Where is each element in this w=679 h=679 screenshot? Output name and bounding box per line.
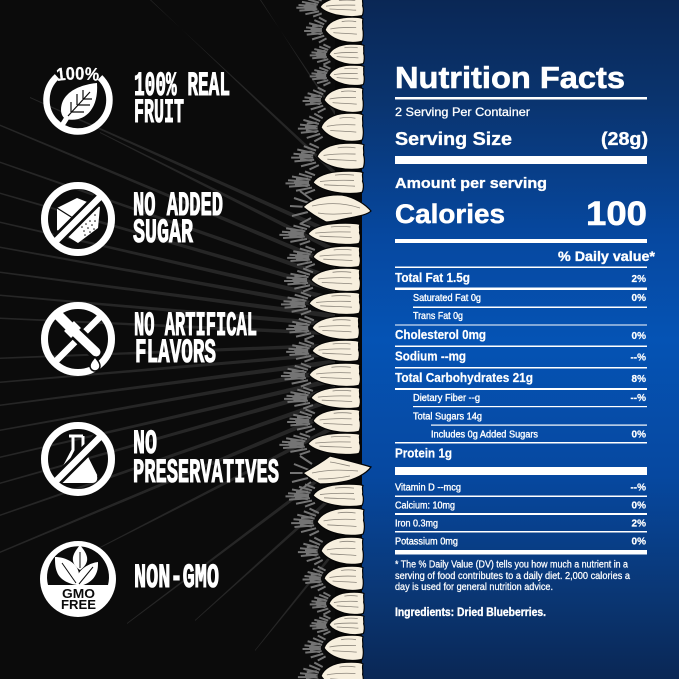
label: no artificial flavors	[134, 308, 257, 373]
label: non-GMO: NON-GMO	[134, 560, 219, 598]
label: no preservatives: NO	[133, 426, 157, 464]
radiating rays background	[0, 0, 345, 651]
label: no added sugar	[133, 188, 223, 253]
row: trans fat: Trans Fat 0g	[413, 311, 463, 322]
label: no added sugar: NO ADDED	[133, 188, 223, 226]
icon: 100% leaf	[43, 66, 113, 135]
row: saturated fat	[413, 293, 646, 304]
row: vitamin D: Vitamin D --mcg	[395, 482, 461, 494]
row: added sugars: 0%	[632, 430, 646, 440]
row: vitamin D: --%	[630, 482, 646, 494]
label: 100% real fruit: FRUIT	[134, 95, 184, 133]
icon: no artificial flavors	[44, 306, 112, 372]
row: cholesterol: 0%	[632, 331, 646, 342]
row: calcium: Calcium: 10mg	[395, 500, 455, 512]
row: iron: Iron 0.3mg	[395, 518, 438, 530]
row: potassium: 0%	[632, 536, 646, 548]
title: nutrition facts: Nutrition Facts	[395, 60, 625, 95]
row: total carbohydrates: Total Carbohydrates 21g	[395, 371, 533, 385]
row: protein: Protein 1g	[395, 446, 452, 460]
label: 100% real fruit	[134, 68, 230, 133]
label: no artificial flavors: FLAVORS	[135, 335, 216, 373]
row: total fat: 2%	[632, 274, 646, 285]
icon: GMO free: GMO	[62, 587, 95, 601]
row: vitamin D	[395, 482, 646, 494]
row: sodium	[395, 350, 646, 364]
icon: no preservatives	[44, 426, 112, 492]
torn edge: teeth divider	[279, 0, 371, 679]
row: sodium: --%	[630, 352, 646, 364]
label: no added sugar: SUGAR	[133, 215, 193, 253]
amount per serving: Amount per serving	[395, 175, 547, 192]
row: total fat	[395, 271, 646, 285]
label: 100% real fruit: 100% REAL	[134, 68, 230, 106]
row: cholesterol: Cholesterol 0mg	[395, 328, 486, 342]
footnote: serving of food contributes to a daily diet. 2,000 calories a	[395, 571, 630, 582]
icon: 100% leaf: 100%	[56, 66, 99, 81]
row: added sugars: Includes 0g Added Sugars	[431, 430, 538, 440]
icon: GMO free	[40, 541, 116, 617]
row: calcium: 0%	[632, 500, 646, 512]
row: cholesterol	[395, 328, 646, 342]
footnote	[395, 560, 630, 593]
daily value heading: % Daily value*	[558, 248, 656, 264]
panel: blue nutrition background	[362, 0, 679, 679]
row: dietary fiber: Dietary Fiber --g	[413, 393, 480, 404]
servings per container: 2 Serving Per Container	[395, 105, 530, 119]
footnote: day is used for general nutrition advice.	[395, 582, 553, 593]
row: saturated fat: 0%	[632, 293, 646, 304]
row: potassium	[395, 536, 646, 548]
label: no preservatives	[133, 426, 279, 493]
row: iron	[395, 518, 646, 530]
row: potassium: Potassium 0mg	[395, 536, 458, 548]
panel: nutrition facts	[395, 60, 656, 619]
calories row	[395, 195, 647, 233]
calories row: 100	[586, 195, 647, 233]
ingredients: Ingredients: Dried Blueberries.	[395, 607, 546, 619]
row: iron: 2%	[632, 518, 646, 530]
row: total sugars: Total Sugars 14g	[413, 412, 482, 422]
row: dietary fiber: --%	[630, 393, 646, 404]
icon: GMO free: FREE	[61, 598, 96, 612]
row: total fat: Total Fat 1.5g	[395, 271, 470, 285]
serving size row	[395, 128, 648, 149]
row: total carbohydrates	[395, 371, 646, 385]
calories row: Calories	[395, 199, 505, 229]
serving size row: Serving Size	[395, 128, 512, 149]
icon: no added sugar	[44, 186, 112, 252]
row: added sugars	[431, 430, 646, 440]
row: sodium: Sodium --mg	[395, 350, 466, 364]
row: saturated fat: Saturated Fat 0g	[413, 293, 481, 304]
footnote: * The % Daily Value (DV) tells you how much a nutrient in a	[395, 560, 628, 570]
row: calcium	[395, 500, 646, 512]
serving size row: (28g)	[601, 128, 648, 149]
row: total carbohydrates: 8%	[632, 374, 646, 385]
shadow strip behind teeth	[335, 0, 365, 679]
label: no artificial flavors: NO ARTIFICAL	[134, 308, 257, 346]
label: no preservatives: PRESERVATIVES	[133, 455, 279, 493]
row: dietary fiber	[413, 393, 646, 404]
